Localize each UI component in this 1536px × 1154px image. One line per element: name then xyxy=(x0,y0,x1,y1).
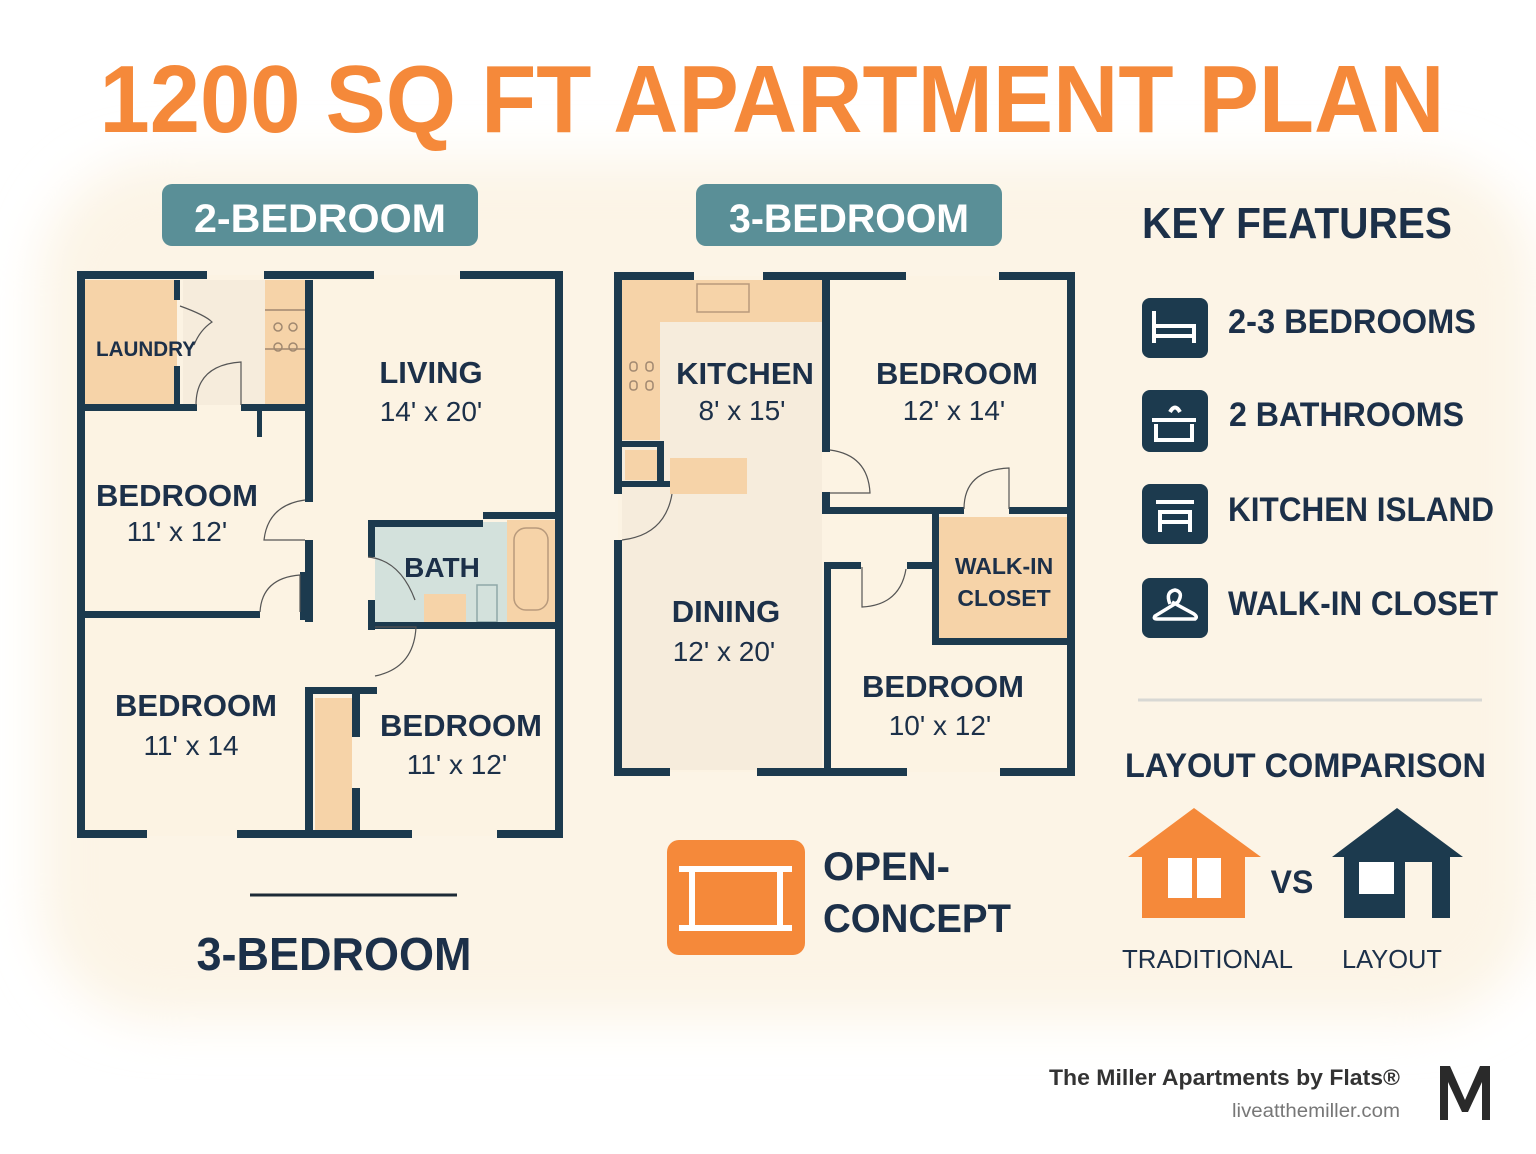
heading: key features: KEY FEATURES xyxy=(1142,199,1452,248)
vs: VS xyxy=(1271,864,1313,900)
badge: 3-bedroom: 3-BEDROOM xyxy=(729,197,969,241)
text: open-concept xyxy=(823,845,1011,941)
label: bedroom 11x12 b: BEDROOM xyxy=(380,708,542,743)
floor plan: 3-bedroom xyxy=(614,272,1075,776)
label: living: LIVING xyxy=(379,355,483,390)
logo: M xyxy=(1440,1066,1490,1120)
label: dining: DINING xyxy=(672,594,780,629)
label: bedroom 11x12: BEDROOM xyxy=(96,478,258,513)
icon: layout house xyxy=(1332,808,1463,918)
text: open-concept: CONCEPT xyxy=(823,897,1011,941)
badge: 3-bedroom xyxy=(696,184,1002,246)
feature: kitchen island: KITCHEN ISLAND xyxy=(1228,491,1494,529)
label: walk-in closet xyxy=(955,553,1053,611)
icon: traditional house xyxy=(1128,808,1261,918)
label: bedroom 10x12: 10' x 12' xyxy=(889,710,991,741)
feature: kitchen island xyxy=(1142,484,1494,544)
label: dining: 12' x 20' xyxy=(673,636,775,667)
feature: bathrooms: 2 BATHROOMS xyxy=(1229,396,1464,434)
label: kitchen xyxy=(676,356,814,426)
label: living xyxy=(379,355,483,427)
title: 1200 SQ FT APARTMENT PLAN xyxy=(100,46,1444,153)
feature: walk-in closet xyxy=(1142,578,1498,638)
label: layout: LAYOUT xyxy=(1342,944,1442,974)
footer: brand: liveatthemiller.com xyxy=(1232,1101,1400,1122)
label: bedroom 11x12 xyxy=(96,478,258,547)
heading: layout comparison: LAYOUT COMPARISON xyxy=(1125,747,1486,785)
label: bedroom 11x12: 11' x 12' xyxy=(127,516,227,547)
label: dining xyxy=(672,594,780,667)
label: bedroom 11x14: BEDROOM xyxy=(115,688,277,723)
label: bedroom 12x14: 12' x 14' xyxy=(903,395,1005,426)
label: bedroom 10x12: BEDROOM xyxy=(862,669,1024,704)
label: 3-bedroom bottom: 3-BEDROOM xyxy=(196,928,472,980)
badge: 2-bedroom: 2-BEDROOM xyxy=(194,197,446,241)
footer: brand: The Miller Apartments by Flats® xyxy=(1049,1065,1400,1090)
label: bedroom 10x12 xyxy=(862,669,1024,741)
label: bedroom 11x14 xyxy=(115,688,277,761)
icon: open concept xyxy=(667,840,805,955)
label: kitchen: KITCHEN xyxy=(676,356,814,391)
badge: 2-bedroom xyxy=(162,184,478,246)
label: traditional: TRADITIONAL xyxy=(1122,944,1293,974)
feature: bedrooms: 2-3 BEDROOMS xyxy=(1228,303,1476,341)
label: bedroom 12x14 xyxy=(876,356,1038,426)
walls xyxy=(77,271,563,838)
feature: bedrooms xyxy=(1142,298,1476,358)
label: walk-in closet: CLOSET xyxy=(957,585,1051,611)
label: kitchen: 8' x 15' xyxy=(699,395,785,426)
label: bath: BATH xyxy=(404,552,480,583)
bath xyxy=(375,522,555,622)
label: laundry: LAUNDRY xyxy=(96,338,196,361)
label: walk-in closet: WALK-IN xyxy=(955,553,1053,579)
feature: bathrooms xyxy=(1142,390,1464,452)
footer: brand xyxy=(1049,1065,1400,1122)
feature: walk-in closet: WALK-IN CLOSET xyxy=(1228,585,1498,623)
label: bedroom 11x14: 11' x 14 xyxy=(143,730,239,761)
label: bedroom 11x12 b: 11' x 12' xyxy=(407,749,507,780)
floor plan: 2-bedroom xyxy=(77,271,563,838)
text: open-concept: OPEN- xyxy=(823,845,950,889)
label: bedroom 12x14: BEDROOM xyxy=(876,356,1038,391)
label: bedroom 11x12 b xyxy=(380,708,542,780)
label: living: 14' x 20' xyxy=(380,396,482,427)
